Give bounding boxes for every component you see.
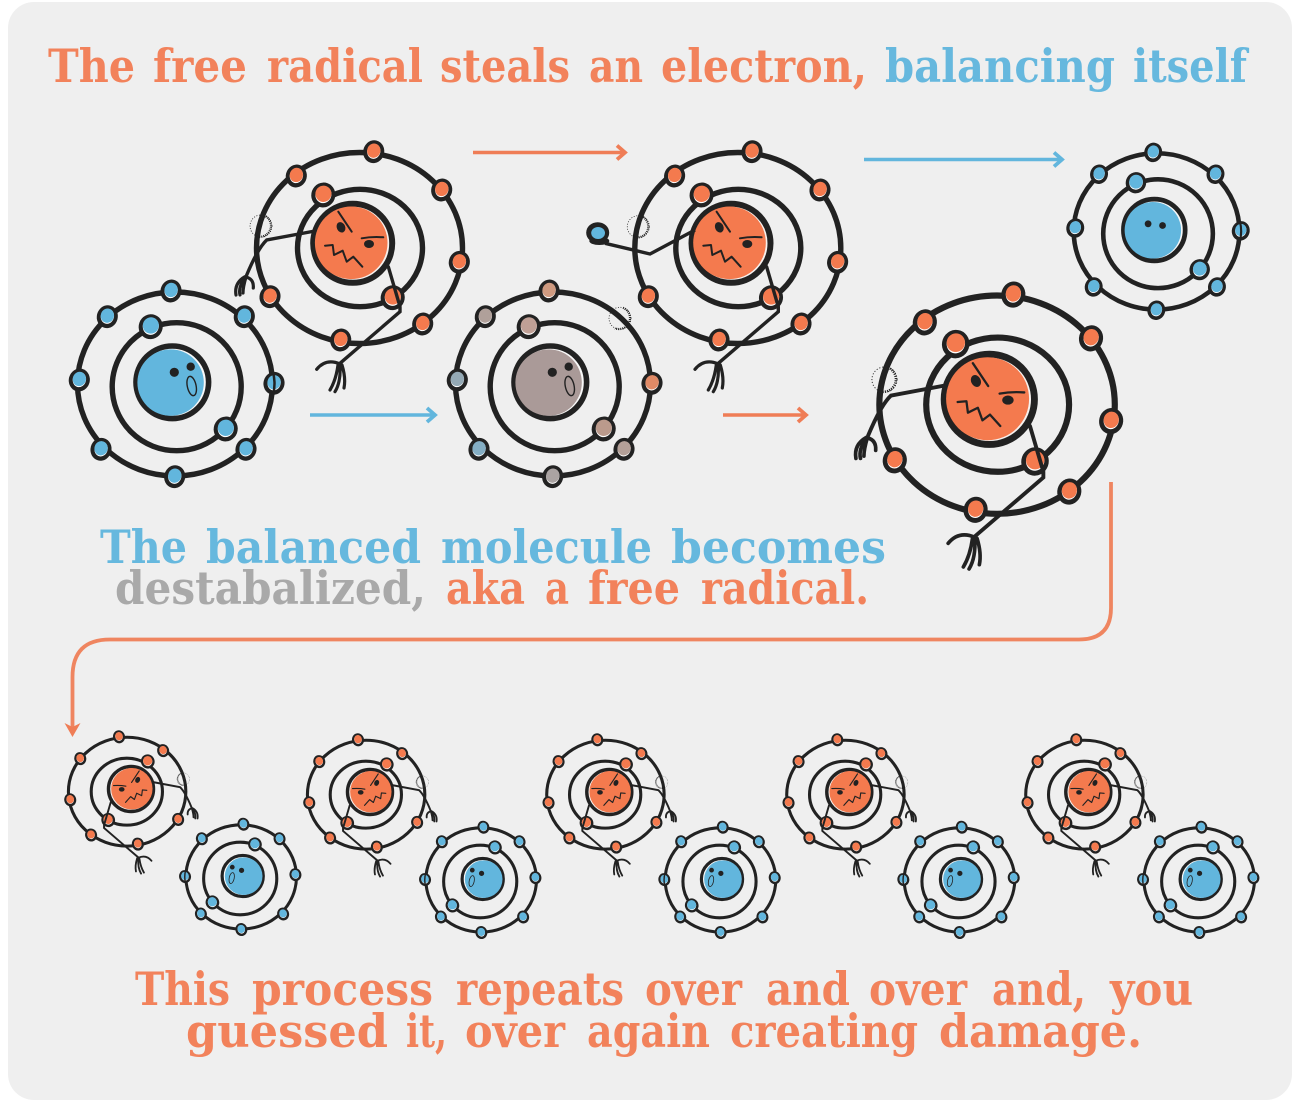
text: this process repeats: repeats (456, 962, 624, 1016)
heading: the free radical steals an electron: electron, (661, 39, 867, 93)
text: this process repeats: over (465, 1004, 566, 1058)
text: the balanced molecule becomes destabilized: balanced (206, 520, 421, 574)
text: the balanced molecule becomes destabilized: free (588, 561, 680, 615)
text: this process repeats: process (252, 962, 433, 1016)
pair 5 (1020, 732, 1261, 940)
heading: the free radical steals an electron: The (48, 39, 135, 93)
heading: the free radical steals an electron: an (589, 39, 643, 93)
atom: destabilized gray molecule (444, 277, 665, 491)
text: this process repeats: and (766, 962, 850, 1016)
arrow: orange top left (473, 146, 625, 160)
text: this process repeats: guessed (186, 1004, 388, 1058)
pair 2 (302, 732, 543, 940)
atom: balanced blue molecule top right (1064, 141, 1252, 322)
text: this process repeats: damage. (939, 1004, 1142, 1058)
arrow: blue top right (864, 152, 1062, 166)
heading: the free radical steals an electron: free (153, 39, 247, 93)
text: the balanced molecule becomes destabilized: a (545, 561, 569, 615)
atom: free radical holding stolen electron (586, 138, 851, 392)
text: the balanced molecule becomes destabilized: The (100, 520, 187, 574)
pair 3 (541, 732, 782, 940)
text: this process repeats: again (587, 1004, 710, 1058)
pair 1 (63, 729, 303, 937)
arrow: blue lower left (310, 408, 435, 422)
text: the balanced molecule becomes destabilized: aka (446, 561, 525, 615)
text: this process repeats (135, 962, 1193, 1058)
text: this process repeats: and, (992, 962, 1086, 1016)
text: the balanced molecule becomes destabilized (100, 520, 886, 615)
text: this process repeats: you (1109, 962, 1193, 1016)
pair 4 (781, 732, 1021, 940)
text: the balanced molecule becomes destabilized: radical. (701, 561, 869, 615)
arrow: orange middle (723, 408, 806, 422)
text: the balanced molecule becomes destabilized: becomes (671, 520, 886, 574)
text: this process repeats: This (135, 962, 230, 1016)
text: this process repeats: creating (730, 1004, 918, 1058)
heading: the free radical steals an electron (48, 39, 1250, 93)
text: this process repeats: it, (406, 1004, 447, 1058)
arrow: long connector to lower row (64, 482, 1111, 737)
atom: angry free radical reaching (236, 138, 472, 392)
atom: balanced blue molecule (66, 277, 287, 491)
atom: large free radical (856, 279, 1126, 569)
text: this process repeats: over (869, 962, 968, 1016)
text: the balanced molecule becomes destabilized: molecule (441, 520, 652, 574)
text: this process repeats: over (645, 962, 743, 1016)
heading: the free radical steals an electron: steals (440, 39, 570, 93)
heading: the free radical steals an electron: itself (1133, 39, 1250, 93)
atom row: repeating free radicals and balanced molecules (63, 729, 1261, 940)
heading: the free radical steals an electron: balancing (885, 39, 1115, 93)
heading: the free radical steals an electron: radical (267, 39, 423, 93)
text: the balanced molecule becomes destabilized: destabalized, (115, 561, 426, 615)
